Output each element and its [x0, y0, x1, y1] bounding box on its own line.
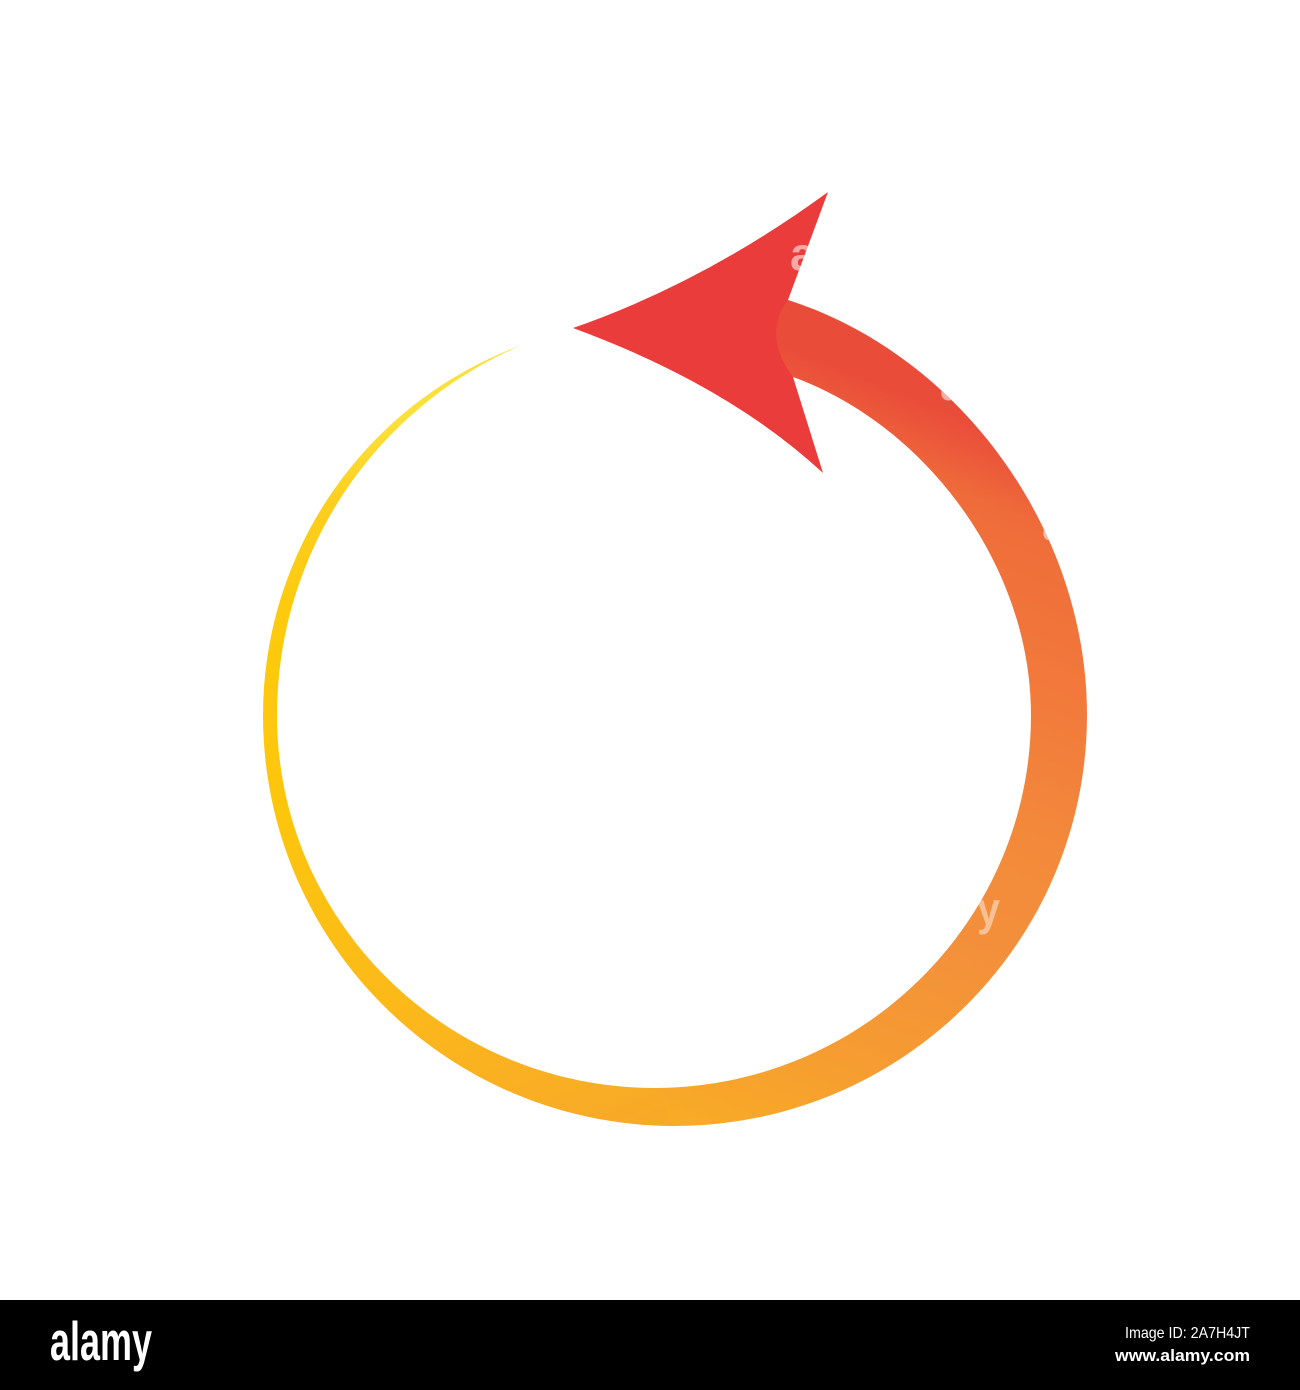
website: www.alamy.com — [1114, 1346, 1250, 1365]
arc: orange right section — [654, 300, 1087, 1126]
watermark fragments on arrow: a — [790, 228, 816, 280]
logo: alamy: alamy — [50, 1310, 152, 1372]
icon: circular arrow — [263, 192, 1087, 1126]
watermark fragments on arrow: a — [1042, 498, 1068, 550]
footer bar — [0, 1300, 1300, 1390]
arc: thin yellow left section — [263, 345, 675, 1126]
watermark fragments on arrow: y — [977, 883, 1000, 935]
watermark fragments on arrow — [790, 228, 1068, 935]
image id: Image ID: 2A7H4JT — [1125, 1325, 1250, 1342]
arrowhead — [573, 192, 828, 473]
watermark fragments on arrow: a — [940, 358, 966, 410]
